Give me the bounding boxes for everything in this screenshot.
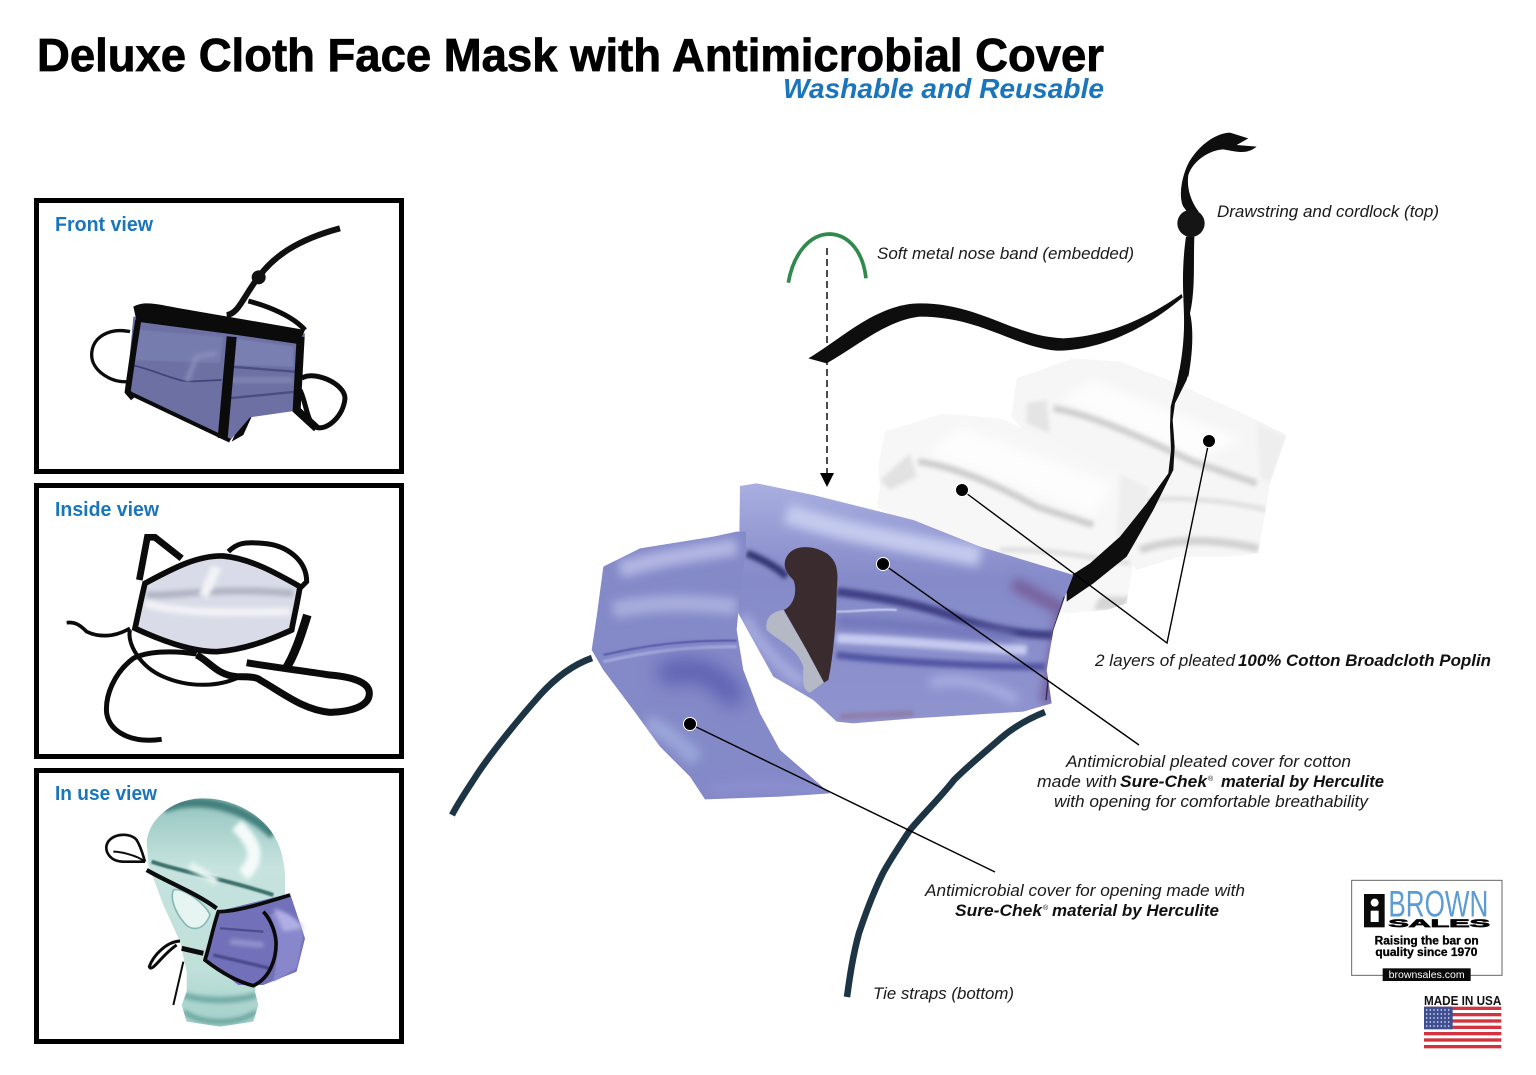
- panel: front view: [36, 200, 402, 472]
- label: opening cover: Antimicrobial cover for opening made with: [924, 882, 1245, 900]
- callout: flap leader line: [684, 718, 995, 872]
- icon: cordlock: [1177, 210, 1205, 237]
- callout: cover leader line: [876, 558, 1139, 745]
- label: opening cover: ®: [1043, 904, 1049, 912]
- photo: mask front: [92, 228, 345, 442]
- arrow: nose band insert: [820, 248, 834, 487]
- icon: US flag: [1424, 1007, 1501, 1048]
- label: nose band: Soft metal nose band (embedded): [877, 245, 1134, 263]
- logo: Brown Sales: BROWN: [1388, 883, 1488, 925]
- diagram: tie strap right: [847, 712, 1045, 997]
- label: tie straps: Tie straps (bottom): [873, 985, 1014, 1003]
- badge: made in USA: [1424, 994, 1501, 1048]
- label: drawstring: Drawstring and cordlock (top): [1217, 203, 1439, 221]
- logo: Brown Sales: quality since 1970: [1375, 945, 1478, 959]
- label: cotton layers: 100% Cotton Broadcloth Poplin: [1238, 652, 1491, 670]
- icon: breathing opening: [784, 547, 837, 683]
- label: pleated cover: [1037, 753, 1384, 811]
- icon: inner lining flap: [766, 610, 825, 693]
- logo: Brown Sales: SALES: [1388, 918, 1491, 930]
- logo: Brown Sales: brownsales.com: [1389, 970, 1465, 981]
- label: pleated cover: Sure-Chek: [1120, 773, 1208, 791]
- label: opening cover: [924, 882, 1245, 920]
- label: cotton layers: 2 layers of pleated: [1094, 652, 1236, 670]
- label: cotton layers: [1094, 652, 1491, 670]
- panel: inside view: [36, 486, 402, 756]
- label: pleated cover: material by Herculite: [1221, 773, 1384, 791]
- logo: Brown Sales: Raising the bar on: [1375, 934, 1479, 948]
- diagram: back cotton layer: [1012, 358, 1287, 570]
- diagram: drawstring vertical with cordlock: [1067, 133, 1257, 602]
- logo: Brown Sales: [1352, 880, 1502, 981]
- badge: made in USA: MADE IN USA: [1424, 994, 1501, 1008]
- subtitle: Washable and Reusable: [783, 73, 1104, 104]
- diagram: antimicrobial main cover: [738, 483, 1073, 723]
- photo: glass head wearing mask: [106, 798, 305, 1027]
- heading: in use view: In use view: [55, 783, 157, 805]
- callout: cotton leader lines: [956, 434, 1216, 643]
- label: pleated cover: ®: [1208, 775, 1214, 783]
- label: pleated cover: with opening for comfortable breathability: [1054, 793, 1370, 811]
- panel: in use view: [36, 770, 402, 1042]
- diagram: drawstring horizontal strap: [808, 294, 1183, 363]
- diagram: front cotton layer: [877, 413, 1150, 613]
- title: Deluxe Cloth Face Mask with Antimicrobial Cover: [37, 29, 1104, 81]
- diagram: opening cover flap: [592, 532, 830, 799]
- diagram: tie strap left: [452, 658, 592, 815]
- photo: mask inside: [67, 537, 369, 740]
- label: opening cover: Sure-Chek: [955, 902, 1043, 920]
- label: opening cover: material by Herculite: [1052, 902, 1219, 920]
- label: pleated cover: Antimicrobial pleated cover for cotton: [1065, 753, 1351, 771]
- icon: nose band: [788, 234, 866, 283]
- label: pleated cover: made with: [1037, 773, 1117, 791]
- heading: front view: Front view: [55, 214, 153, 236]
- heading: inside view: Inside view: [55, 499, 159, 521]
